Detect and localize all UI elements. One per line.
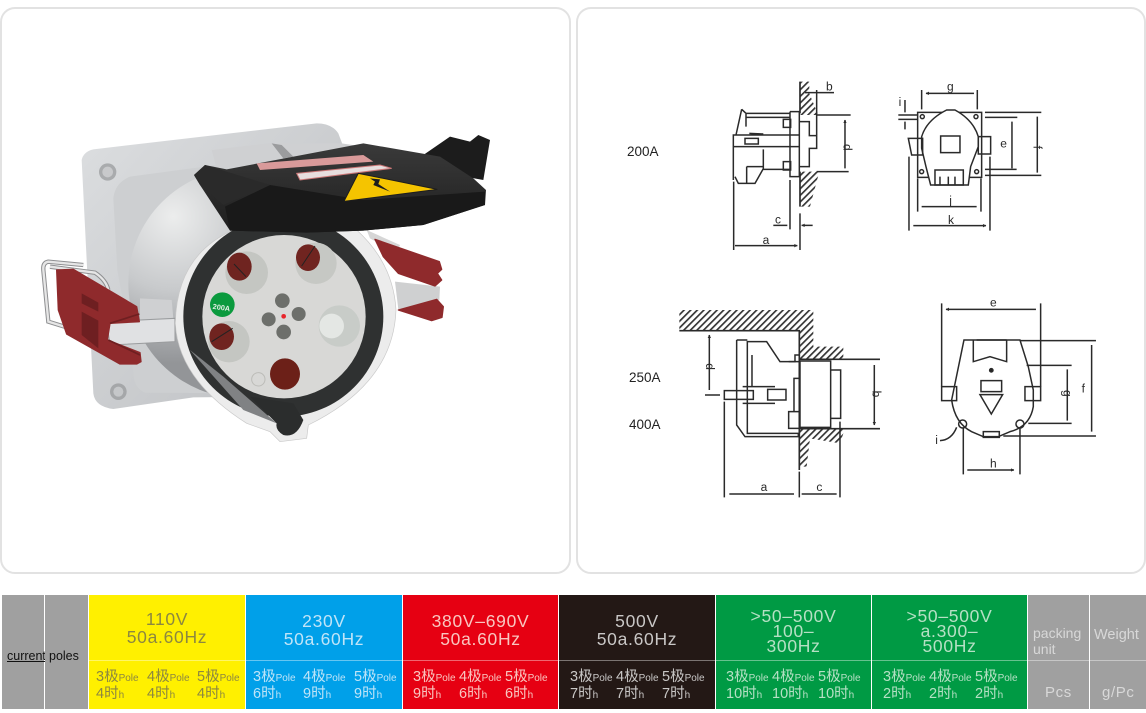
drawing: 200A side: a — [763, 233, 770, 247]
column: 230V: 3极Pole — [253, 669, 296, 685]
column: 100-300Hz: 10时h — [726, 686, 762, 702]
column: 300-500Hz: >50–500V — [907, 606, 992, 626]
drawing: 200A side: c — [775, 212, 781, 226]
drawing: 200A front: f — [1030, 146, 1044, 150]
drawing: 250A 400A side — [679, 310, 884, 497]
column: 100-300Hz: 10时h — [818, 686, 854, 702]
column: 110V: 4极Pole — [147, 669, 190, 685]
contact: empty right — [319, 305, 360, 347]
column: 300-500Hz: 2时h — [975, 686, 1003, 702]
column: 300-500Hz: 4极Pole — [929, 669, 972, 685]
column: 500V: 7时h — [570, 686, 598, 702]
drawing: 250A 400A side: b — [870, 391, 884, 398]
column: 380V-690V: 6时h — [505, 686, 533, 702]
column: 230V: 6时h — [253, 686, 281, 702]
drawing: 200A side: b — [826, 80, 833, 94]
drawing: 200A front: i — [899, 95, 901, 109]
panel: product photo — [0, 7, 571, 574]
column: 100-300Hz — [716, 595, 871, 709]
column: 110V: 50a.60Hz — [127, 626, 207, 646]
header cell: current — [2, 595, 44, 709]
drawing: 200A front — [898, 80, 1044, 231]
green 200A badge — [210, 292, 235, 317]
column: 100-300Hz: 3极Pole — [726, 669, 769, 685]
column: 300-500Hz: 5极Pole — [975, 669, 1018, 685]
drawing: 200A side: d — [840, 144, 854, 151]
header cell: poles — [45, 595, 88, 709]
column: 110V — [89, 595, 245, 709]
contact face — [202, 235, 366, 398]
column: 500V: 4极Pole — [616, 669, 659, 685]
label: 400A: 400A — [629, 417, 661, 432]
column: 100-300Hz: 10时h — [772, 686, 808, 702]
column: 110V: 5极Pole — [197, 669, 240, 685]
column: 230V: 9时h — [303, 686, 331, 702]
drawing: 250A 400A side: a — [761, 480, 768, 494]
column: 110V: 3极Pole — [96, 669, 139, 685]
column: 100-300Hz: 4极Pole — [772, 669, 815, 685]
column: 100-300Hz: 5极Pole — [818, 669, 861, 685]
column: 230V: 50a.60Hz — [284, 628, 364, 648]
column: 110V: 4时h — [197, 686, 225, 702]
hinged black lid — [194, 135, 490, 233]
column: 500V: 7时h — [662, 686, 690, 702]
column: packing unit — [1028, 595, 1089, 709]
earth mark — [252, 373, 265, 386]
column: 110V: 4时h — [96, 686, 124, 702]
drawing: 200A front: g — [947, 80, 954, 94]
column: 230V: 230V — [302, 611, 346, 631]
left clip with handle — [43, 262, 175, 364]
column: weight: g/Pc — [1102, 684, 1134, 701]
drawing: 250A 400A front: f — [1082, 382, 1086, 396]
drawing: 250A 400A side: c — [816, 480, 822, 494]
column: 380V-690V: 3极Pole — [413, 669, 456, 685]
drawing: 200A front: j — [948, 193, 952, 207]
column: 230V: 9时h — [354, 686, 382, 702]
warning triangle — [344, 173, 437, 201]
column: 380V-690V — [403, 595, 558, 709]
column: 500V: 5极Pole — [662, 669, 705, 685]
column: packing unit: Pcs — [1045, 684, 1072, 701]
red label plates — [257, 155, 373, 170]
column: 500V: 50a.60Hz — [597, 628, 677, 648]
label: 200A: 200A — [627, 144, 659, 159]
column: 110V: 4时h — [147, 686, 175, 702]
drawing: 250A 400A front: g — [1060, 390, 1074, 397]
mounting plate — [82, 123, 343, 409]
drawing: 250A 400A front — [935, 296, 1096, 474]
column: 500V: 3极Pole — [570, 669, 613, 685]
red indicator — [281, 314, 286, 319]
column: 380V-690V: 9时h — [413, 686, 441, 702]
column: 300-500Hz: 2时h — [929, 686, 957, 702]
spec table — [2, 595, 1146, 709]
panel: dimension drawings — [576, 7, 1146, 574]
column: 110V: 110V — [146, 609, 188, 629]
column: 230V — [246, 595, 402, 709]
contact: lower left — [208, 321, 250, 362]
column: 380V-690V: 5极Pole — [505, 669, 548, 685]
contact: top right — [295, 243, 337, 284]
label: 250A: 250A — [629, 370, 661, 385]
column: weight — [1090, 595, 1146, 709]
front ring — [175, 217, 396, 442]
header cell: current: current — [7, 649, 46, 663]
column: 300-500Hz: 3极Pole — [883, 669, 926, 685]
column: 100-300Hz: 100– — [773, 621, 814, 641]
header cell: poles: poles — [49, 649, 79, 663]
drawing: 250A 400A side: d — [703, 363, 717, 370]
contact: empty right centre — [319, 314, 344, 338]
column: 500V: 7时h — [616, 686, 644, 702]
column: 500V — [559, 595, 715, 709]
column: 230V: 4极Pole — [303, 669, 346, 685]
column: 300-500Hz: 2时h — [883, 686, 911, 702]
drawing: 200A front: k — [948, 213, 955, 227]
column: packing unit: packing — [1033, 625, 1081, 641]
contact: top left — [225, 251, 268, 294]
socket body — [113, 165, 358, 398]
drawing: 200A side — [733, 80, 854, 250]
column: 380V-690V: 6时h — [459, 686, 487, 702]
column: 300-500Hz — [872, 595, 1027, 709]
pilot contacts — [262, 293, 306, 339]
drawing: 250A 400A front: i — [935, 433, 938, 447]
contact: bottom — [270, 358, 300, 390]
column: 100-300Hz: 300Hz — [766, 636, 821, 656]
drawing: 250A 400A front: e — [990, 296, 997, 310]
right clip — [367, 230, 443, 321]
drawing: 200A front: e — [1000, 136, 1007, 150]
drawing: 250A 400A front: h — [990, 456, 997, 470]
column: weight: Weight — [1094, 627, 1139, 643]
product photo: industrial socket — [41, 123, 490, 442]
column: 380V-690V: 4极Pole — [459, 669, 502, 685]
column: 300-500Hz: a.300– — [921, 621, 978, 641]
green 200A badge: 200A — [212, 302, 231, 313]
column: 380V-690V: 380V–690V — [432, 611, 529, 631]
column: 500V: 500V — [615, 611, 659, 631]
column: 380V-690V: 50a.60Hz — [440, 628, 521, 648]
column: 230V: 5极Pole — [354, 669, 397, 685]
column: packing unit: unit — [1033, 641, 1056, 657]
column: 100-300Hz: >50–500V — [751, 606, 836, 626]
column: 300-500Hz: 500Hz — [922, 636, 977, 656]
